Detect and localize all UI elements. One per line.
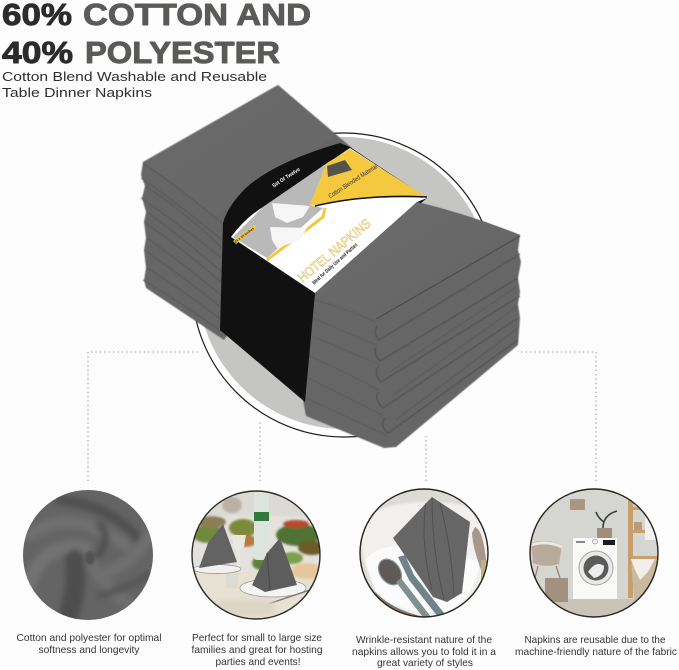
glass — [232, 535, 246, 549]
caption: wrinkle-resistant — [352, 634, 496, 669]
caption: wrinkle-resistant: napkins allows you to fold it in a — [352, 646, 496, 658]
photo: laundry room — [529, 488, 659, 618]
size tag: 24 x 24 Inches — [234, 226, 255, 244]
wooden shelf — [628, 498, 658, 598]
background circle — [192, 133, 496, 437]
caption: softness — [16, 632, 162, 656]
right basket — [631, 559, 657, 600]
black band — [220, 143, 427, 402]
subtitle: Cotton Blend Washable and Reusable — [2, 69, 267, 84]
brand logo — [327, 160, 352, 177]
front napkin stack — [302, 202, 521, 448]
caption: families: families and great for hosting — [192, 644, 323, 656]
caption: families: parties and events! — [216, 656, 300, 668]
title — [2, 0, 311, 70]
caption: families: Perfect for small to large size — [192, 632, 322, 644]
caption: reusable: Napkins are reusable due to the — [524, 634, 666, 646]
spoon — [378, 558, 430, 616]
caption: wrinkle-resistant: Wrinkle-resistant nature of the — [356, 634, 492, 646]
label text — [271, 163, 379, 286]
dotted connector lines — [88, 352, 596, 481]
label grey panel — [233, 163, 327, 258]
title: POLYESTER — [85, 35, 280, 70]
photo: folded napkin with cutlery — [359, 488, 489, 618]
subtitle: Table Dinner Napkins — [2, 85, 153, 100]
subtitle — [2, 69, 267, 100]
napkin stack product — [141, 85, 521, 448]
photo: fabric swirl — [20, 488, 156, 625]
left basket — [531, 541, 568, 602]
washing machine — [573, 538, 617, 599]
front flap over label — [315, 202, 520, 319]
fork — [398, 555, 444, 617]
label text: Ideal for Daily Use and Parties — [311, 242, 359, 286]
label yellow panel — [310, 149, 425, 205]
bottle — [254, 492, 269, 560]
label napkin images — [272, 203, 310, 223]
wall plaque — [570, 499, 585, 510]
napkin — [393, 497, 470, 602]
caption: families — [192, 632, 323, 668]
plant — [596, 511, 617, 538]
label — [231, 148, 427, 293]
caption: softness: Cotton and polyester for optimal — [16, 632, 162, 644]
caption: reusable: machine-friendly nature of the fabric — [515, 646, 677, 658]
label text: HOTEL NAPKINS — [295, 216, 374, 285]
caption: wrinkle-resistant: great variety of styles — [377, 657, 473, 669]
back napkin stack — [141, 85, 352, 340]
title: 40% — [2, 35, 73, 70]
label text: Set Of Twelve — [271, 167, 302, 189]
caption: reusable — [515, 634, 677, 658]
label text: Cotton Blended Material — [327, 163, 379, 200]
photo: table setting — [190, 490, 326, 622]
caption: softness: softness and longevity — [38, 644, 140, 656]
